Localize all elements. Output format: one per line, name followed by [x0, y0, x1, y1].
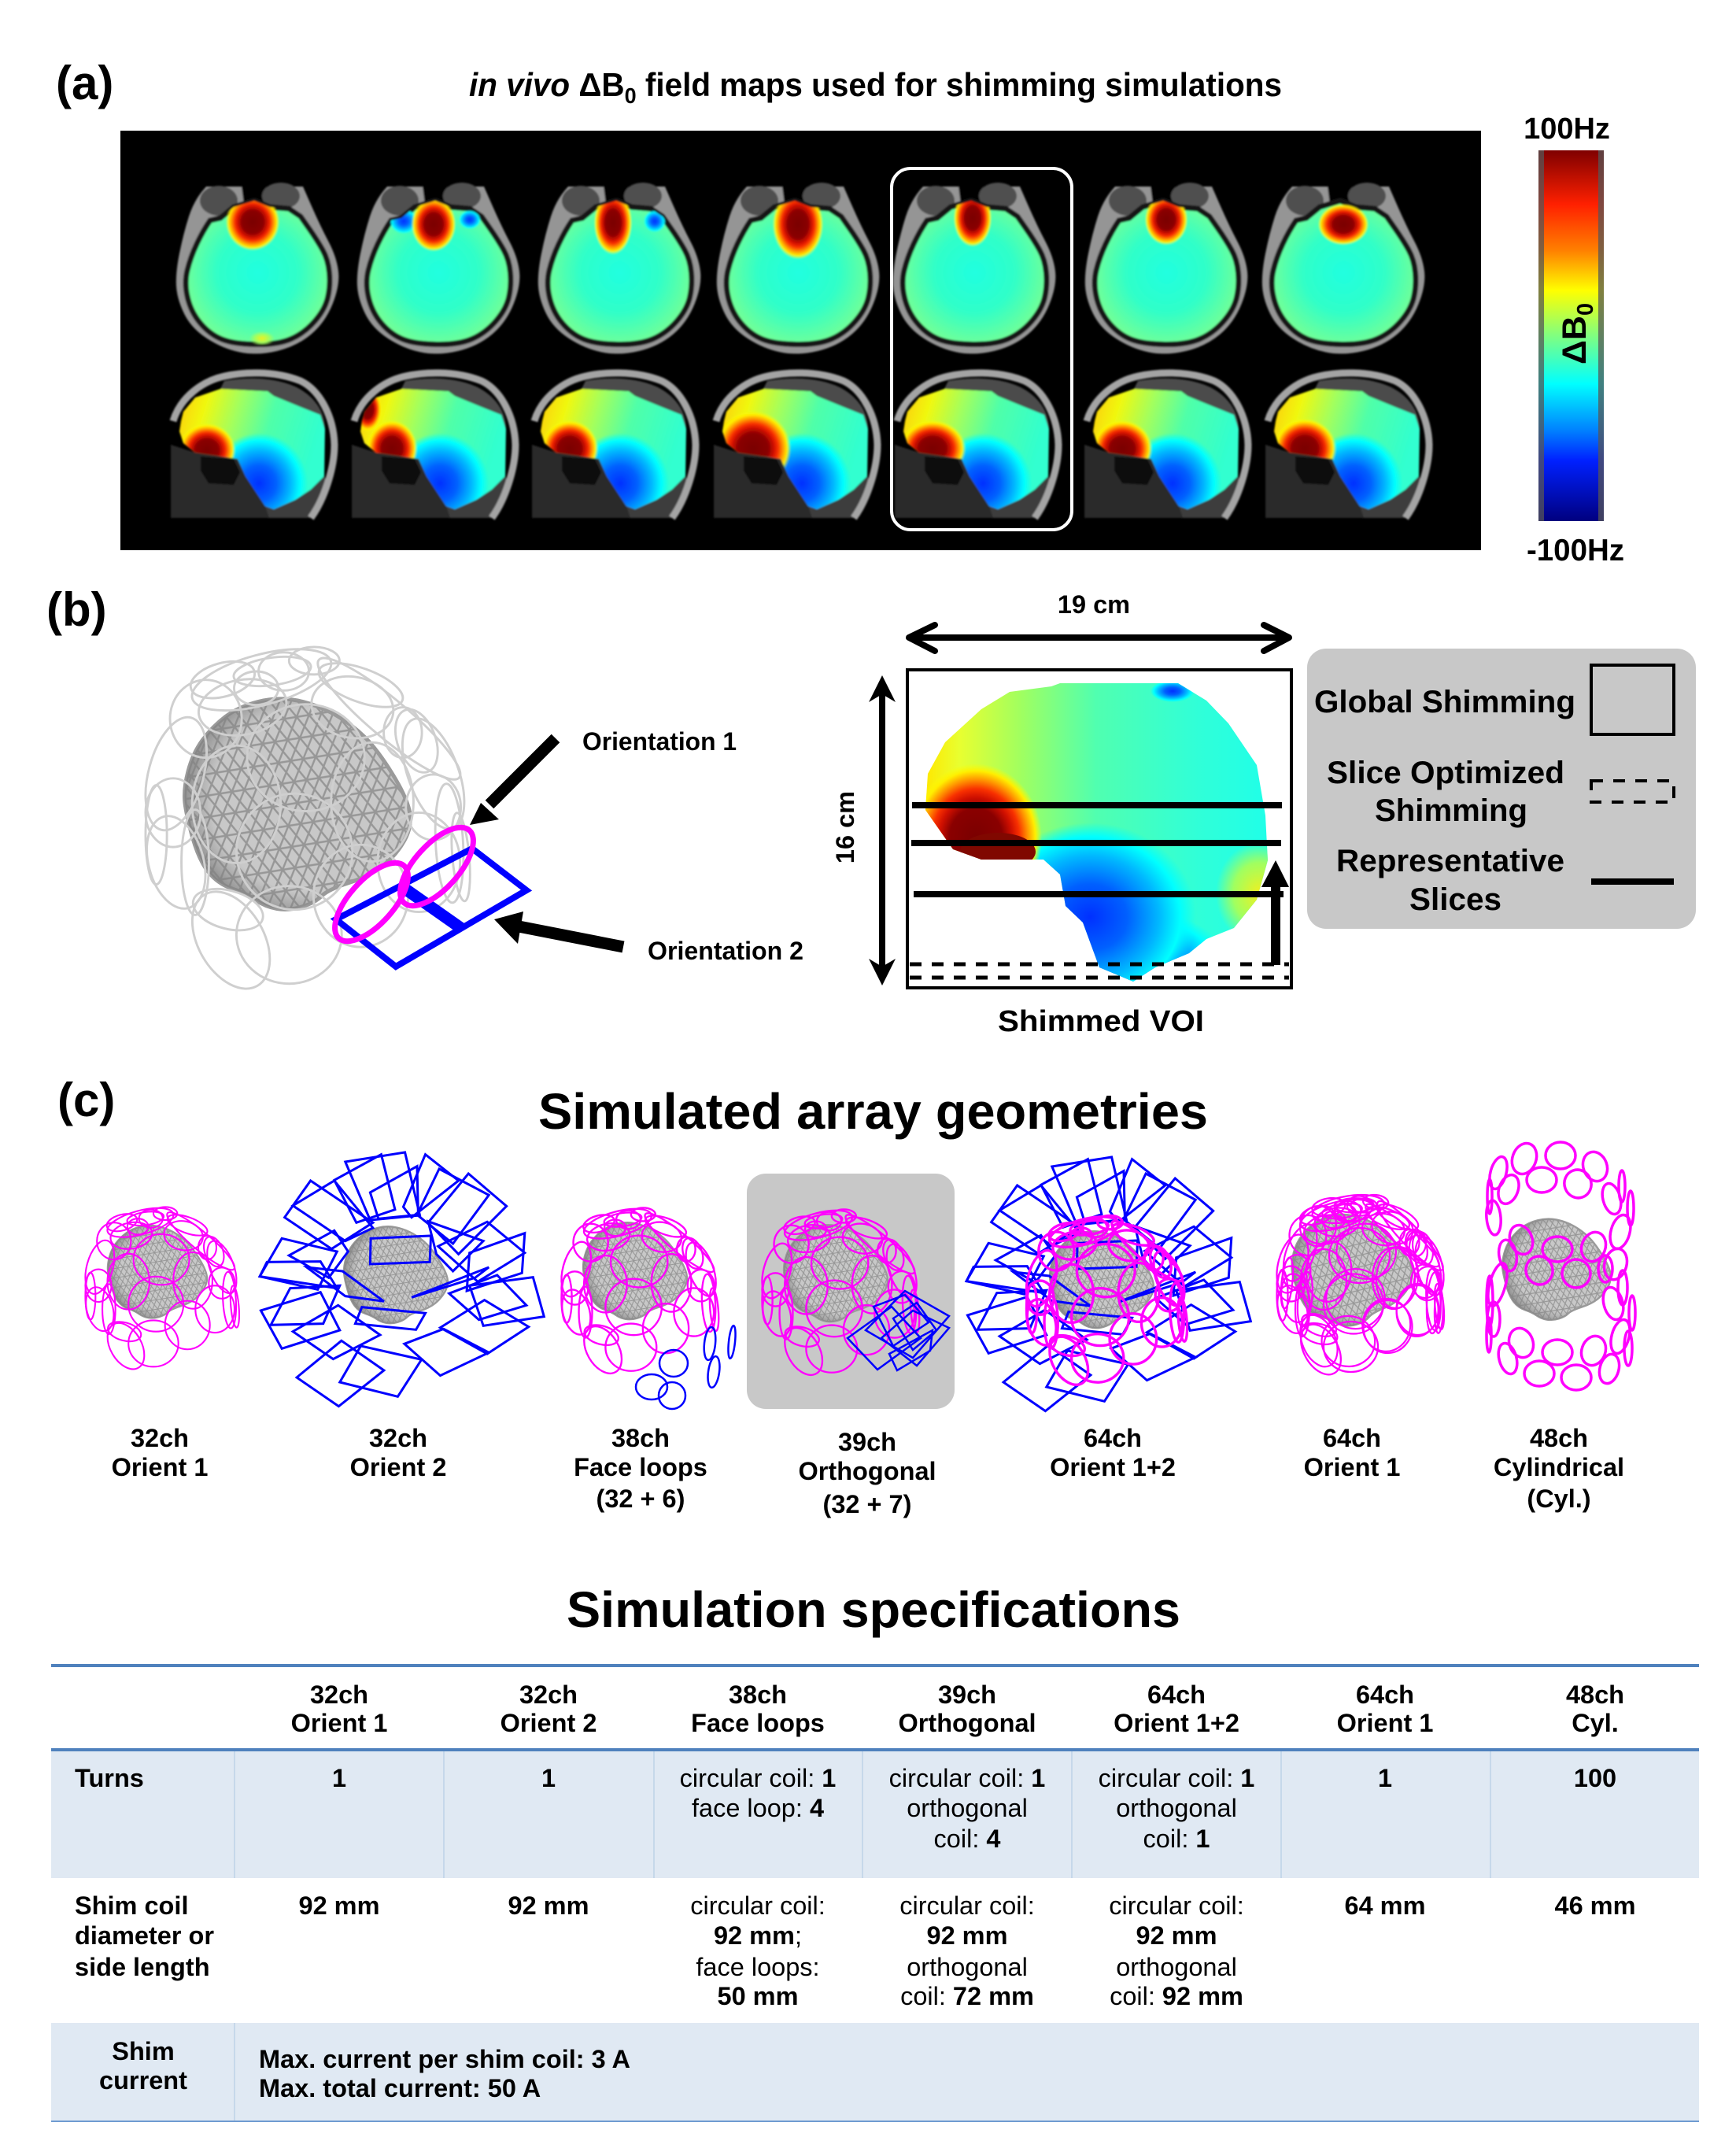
caption: 39ch orthogonal: 39ch — [838, 1428, 896, 1456]
caption: 39ch orthogonal — [798, 1428, 936, 1518]
table header row: Cyl. — [1572, 1709, 1619, 1737]
table row: shim current: Shim — [112, 2037, 175, 2065]
axial head 3 — [538, 183, 700, 353]
caption: 39ch orthogonal: Orthogonal — [798, 1457, 936, 1485]
table header row: 64ch — [1147, 1681, 1206, 1709]
table row: shim coil diameter: coil: 72 mm — [900, 1982, 1034, 2010]
table row: turns: coil: 1 — [1143, 1825, 1210, 1853]
caption: 48ch cylindrical: Cylindrical — [1494, 1453, 1624, 1481]
table row: turns — [75, 1764, 1616, 1853]
legend: representative slices — [1336, 844, 1674, 917]
table row: turns: 1 — [332, 1764, 346, 1792]
legend: slice optimized shimming: Shimming — [1375, 793, 1527, 828]
table header row: 48ch — [1566, 1681, 1624, 1709]
table row: shim current: current — [99, 2066, 187, 2095]
representative slices — [911, 805, 1284, 894]
caption: 38ch face loops — [574, 1424, 707, 1513]
heading: simulated array geometries: Simulated array geometries — [538, 1083, 1208, 1140]
label: 16 cm: 16 cm — [831, 791, 859, 863]
caption: 32ch orient 1 — [112, 1424, 208, 1481]
geometry: 48ch cylindrical — [1484, 1140, 1635, 1390]
panel label (c): (c) — [57, 1074, 115, 1126]
highlight frame — [892, 168, 1072, 530]
caption: 32ch orient 1: Orient 1 — [112, 1453, 208, 1481]
caption: 32ch orient 2 — [350, 1424, 446, 1481]
table row: shim coil diameter: 92 mm — [508, 1891, 589, 1920]
sagittal head 3 — [532, 373, 696, 534]
table row: shim coil diameter: coil: 92 mm — [1110, 1982, 1243, 2010]
table header row: Orient 1 — [291, 1709, 387, 1737]
axial head 7 — [1262, 183, 1424, 353]
table row: shim current: Max. current per shim coil: 3 A — [259, 2045, 630, 2073]
table row: turns: circular coil: 1 — [1099, 1764, 1254, 1792]
table header row: 38ch — [729, 1681, 787, 1709]
table row: shim coil diameter: 92 mm; — [714, 1921, 802, 1950]
table row: shim coil diameter: orthogonal — [1116, 1953, 1237, 1981]
panel label (a): (a) — [56, 57, 113, 109]
geometry: 64ch orient 1 — [1267, 1181, 1459, 1385]
sagittal head 1 — [171, 373, 334, 534]
geometry: 32ch orient 1 — [80, 1202, 242, 1375]
colorbar: 100Hz — [1524, 113, 1610, 146]
caption: 48ch cylindrical — [1494, 1424, 1624, 1513]
caption: 64ch orient 1: 64ch — [1323, 1424, 1381, 1452]
table row: shim coil diameter: 92 mm — [299, 1891, 379, 1920]
table row: shim coil diameter: 64 mm — [1345, 1891, 1425, 1920]
table header row: 39ch — [938, 1681, 996, 1709]
label: orientation 1: Orientation 1 — [582, 727, 737, 756]
table row: shim coil diameter: circular coil: — [690, 1891, 826, 1920]
title: in vivo field maps: 0 — [625, 83, 637, 108]
legend: representative slices: Slices — [1409, 882, 1501, 917]
axial head 4 — [717, 183, 879, 353]
diagram: head with coil orientations — [135, 637, 526, 1002]
caption: 38ch face loops: (32 + 6) — [597, 1485, 685, 1513]
arrow: orientation 2 — [494, 911, 623, 947]
title: in vivo field maps: field maps used for shimming simulations — [637, 66, 1282, 103]
colorbar — [1524, 113, 1624, 568]
table row: shim coil diameter: 92 mm — [927, 1921, 1007, 1950]
colorbar: ΔB — [1556, 316, 1594, 364]
table row: turns: orthogonal — [1116, 1794, 1237, 1822]
colorbar: 0 — [1573, 303, 1598, 316]
table header row: Orient 1 — [1337, 1709, 1433, 1737]
sweep arrow — [1261, 860, 1289, 965]
geometry: 32ch orient 2 — [260, 1152, 544, 1407]
sagittal head 4 — [714, 373, 877, 534]
table row: shim coil diameter: circular coil: — [899, 1891, 1035, 1920]
caption: 38ch face loops: 38ch — [611, 1424, 670, 1452]
table row: shim current: Max. total current: 50 A — [259, 2074, 541, 2102]
table row: shim coil diameter: 46 mm — [1555, 1891, 1635, 1920]
sagittal head 6 — [1084, 373, 1248, 534]
label: orientation 2: Orientation 2 — [648, 937, 803, 965]
caption: 48ch cylindrical: (Cyl.) — [1527, 1485, 1591, 1513]
table header row: Orient 1+2 — [1114, 1709, 1239, 1737]
table header row: 32ch — [519, 1681, 578, 1709]
caption: 39ch orthogonal: (32 + 7) — [823, 1490, 911, 1518]
slice optimized dashes — [910, 964, 1289, 978]
table row: shim coil diameter: orthogonal — [907, 1953, 1028, 1981]
table row: shim current — [99, 2037, 630, 2102]
arrow: horizontal dimension — [909, 625, 1289, 651]
table row: turns: orthogonal — [907, 1794, 1028, 1822]
caption: 32ch orient 2: Orient 2 — [350, 1453, 446, 1481]
axial head 5 — [893, 183, 1055, 353]
axial head 6 — [1085, 183, 1247, 353]
axial head 2 — [357, 183, 519, 353]
table row: turns: face loop: 4 — [692, 1794, 824, 1822]
table header row — [291, 1681, 1624, 1737]
caption: 64ch orient 1+2: Orient 1+2 — [1050, 1453, 1176, 1481]
caption: 48ch cylindrical: 48ch — [1530, 1424, 1588, 1452]
table row: turns: coil: 4 — [934, 1825, 1000, 1853]
table row: shim coil diameter: diameter or — [75, 1921, 214, 1950]
table row: turns: circular coil: 1 — [889, 1764, 1045, 1792]
caption: 64ch orient 1+2 — [1050, 1424, 1176, 1481]
caption: 64ch orient 1: Orient 1 — [1304, 1453, 1400, 1481]
caption: 64ch orient 1+2: 64ch — [1084, 1424, 1142, 1452]
table header row: Orient 2 — [500, 1709, 597, 1737]
title: in vivo field maps: in vivo ΔB — [469, 66, 626, 103]
table: simulation specifications — [51, 1666, 1699, 2121]
heading: simulation specifications: Simulation specifications — [567, 1581, 1180, 1638]
table row: turns: 1 — [541, 1764, 556, 1792]
sagittal head 7 — [1265, 373, 1429, 534]
label: 19 cm: 19 cm — [1058, 590, 1130, 619]
caption: 38ch face loops: Face loops — [574, 1453, 707, 1481]
geometry: 39ch orthogonal (highlighted) — [747, 1174, 955, 1409]
table header row: 32ch — [310, 1681, 368, 1709]
table row: turns: Turns — [75, 1764, 144, 1792]
sagittal head 5 — [895, 373, 1058, 534]
legend: slice optimized shimming: Slice Optimized — [1327, 756, 1564, 790]
panel label (b): (b) — [46, 583, 107, 636]
table row: turns: circular coil: 1 — [680, 1764, 836, 1792]
table row: shim coil diameter: 92 mm — [1136, 1921, 1217, 1950]
caption: 64ch orient 1 — [1304, 1424, 1400, 1481]
table header row: 64ch — [1356, 1681, 1414, 1709]
table row: shim coil diameter — [75, 1891, 1635, 2010]
table header row: Face loops — [691, 1709, 825, 1737]
geometry: 64ch orient 1+2 — [966, 1157, 1250, 1411]
legend: slice optimized shimming — [1327, 756, 1674, 828]
axial head 1 — [176, 183, 338, 353]
label: shimmed VOI: Shimmed VOI — [998, 1005, 1204, 1038]
sagittal head 2 — [352, 373, 515, 534]
panel: field maps — [120, 131, 1481, 550]
colorbar: -100Hz — [1527, 534, 1624, 568]
arrow: vertical dimension — [869, 675, 896, 985]
geometry: 38ch face loops — [556, 1203, 737, 1409]
table row: shim coil diameter: side length — [75, 1953, 210, 1981]
table row: shim coil diameter: circular coil: — [1109, 1891, 1244, 1920]
table row: shim coil diameter: Shim coil — [75, 1891, 188, 1920]
legend panel — [1307, 649, 1696, 929]
table row: turns: 1 — [1378, 1764, 1392, 1792]
table row: shim coil diameter: 50 mm — [718, 1982, 798, 2010]
legend: representative slices: Representative — [1336, 844, 1564, 878]
caption: 32ch orient 2: 32ch — [369, 1424, 427, 1452]
chart: shimmed VOI field map — [907, 670, 1302, 1019]
table row: shim coil diameter: face loops: — [696, 1953, 820, 1981]
caption: 32ch orient 1: 32ch — [131, 1424, 189, 1452]
table row: turns: 100 — [1574, 1764, 1616, 1792]
legend: global shimming: Global Shimming — [1314, 685, 1575, 719]
table header row: Orthogonal — [898, 1709, 1036, 1737]
arrow: orientation 1 — [470, 738, 556, 825]
legend: global shimming — [1314, 665, 1674, 734]
